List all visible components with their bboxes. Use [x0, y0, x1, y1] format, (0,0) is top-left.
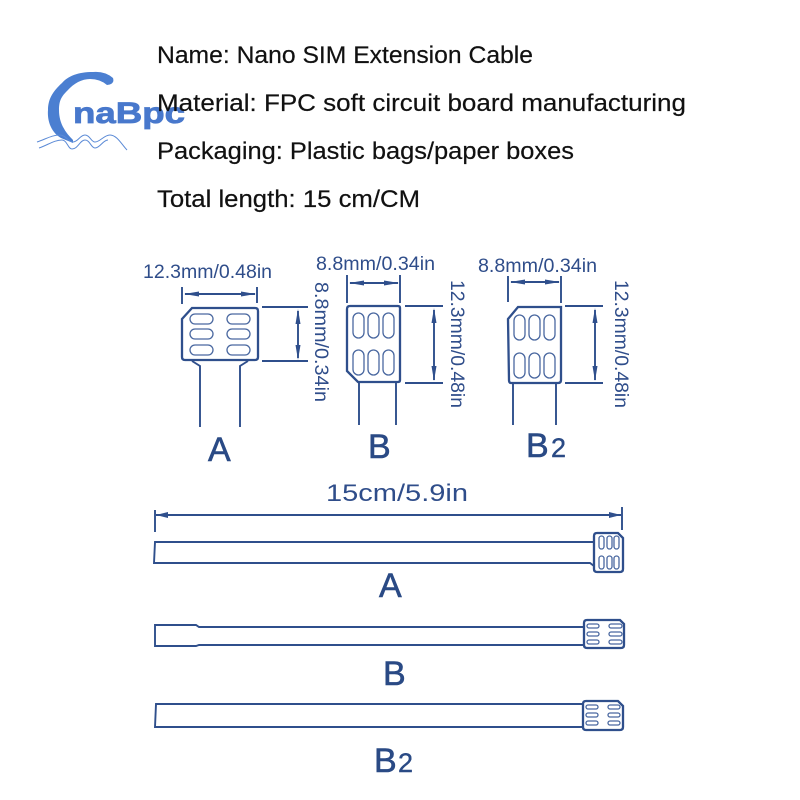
diagram: chip B with dimensions	[316, 254, 467, 466]
diagram: chip B2 with dimensions	[478, 256, 631, 465]
diagram: chip B2 with dimensions: 12.3mm/0.48in	[610, 280, 631, 408]
spec text block: Total length: 15 cm/CM	[157, 186, 420, 213]
diagram: chip A with dimensions: 8.8mm/0.34in	[310, 282, 331, 402]
cable B2: B	[374, 742, 397, 780]
diagram: chip A with dimensions: A	[208, 431, 231, 469]
diagram: chip B2 with dimensions: 8.8mm/0.34in	[478, 256, 597, 277]
cable B	[155, 620, 624, 693]
spec text block: Name: Nano SIM Extension Cable	[157, 42, 533, 69]
cable B: B	[383, 655, 406, 693]
diagram: chip B with dimensions: B	[368, 428, 391, 466]
logo: CnaBpc with waves: naBpc	[73, 97, 185, 130]
cable A: A	[379, 567, 402, 605]
diagram: chip B with dimensions: 8.8mm/0.34in	[316, 254, 435, 275]
diagram: chip A with dimensions: 12.3mm/0.48in	[143, 262, 272, 283]
diagram: chip B2 with dimensions: 2	[551, 433, 566, 463]
diagram: chip B with dimensions: 12.3mm/0.48in	[446, 280, 467, 408]
spec text block: Material: FPC soft circuit board manufacturing	[157, 90, 686, 117]
length dimension: 15cm/5.9in: 15cm/5.9in	[326, 480, 468, 507]
diagram: chip A with dimensions	[143, 262, 331, 469]
length dimension: 15cm/5.9in	[155, 480, 622, 532]
logo: CnaBpc with waves	[37, 72, 185, 150]
spec text block: Packaging: Plastic bags/paper boxes	[157, 138, 574, 165]
cable A	[154, 533, 623, 605]
spec text block	[157, 42, 686, 213]
cable B2	[155, 701, 623, 780]
diagram: chip B2 with dimensions: B	[526, 427, 549, 465]
cable B2: 2	[398, 748, 413, 778]
